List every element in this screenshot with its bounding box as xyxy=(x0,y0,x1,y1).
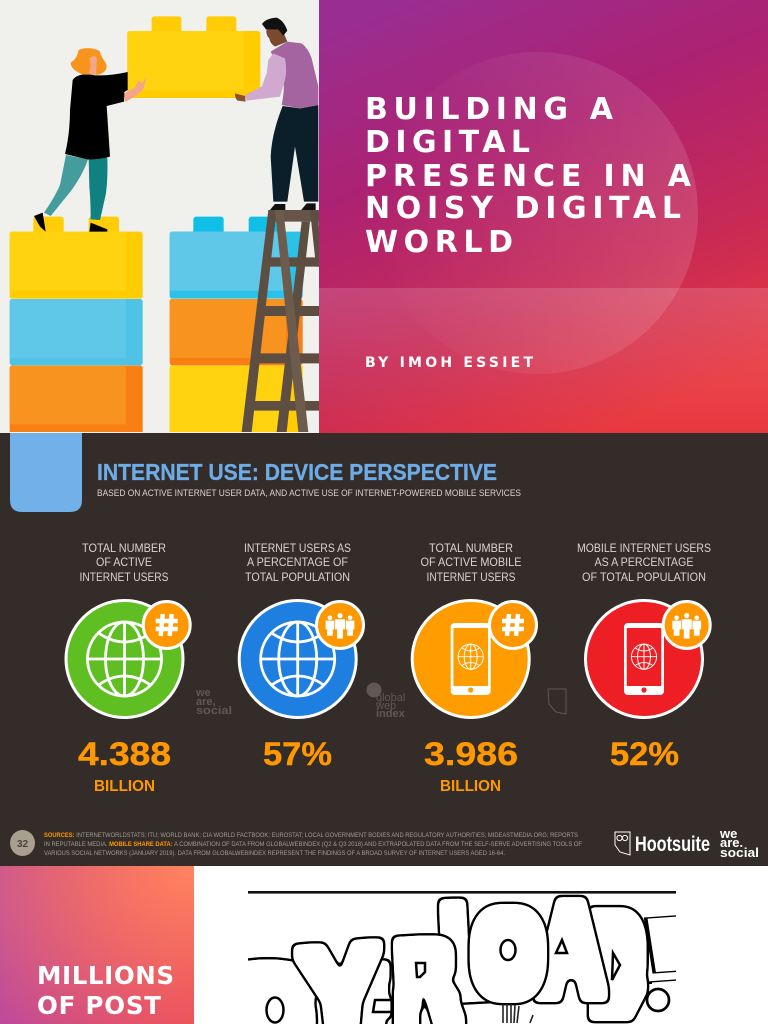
stat: total internet users xyxy=(66,541,190,795)
heading: MILLIONS xyxy=(37,961,174,990)
icon: wooden ladder xyxy=(242,210,320,432)
stat: mobile users share of population: AS A PERCENTAGE xyxy=(594,555,694,569)
stat: mobile users share of population: MOBILE INTERNET USERS xyxy=(577,541,711,555)
cartoon lettering: OVERLOAD!: R xyxy=(394,922,455,1023)
panel: title banner xyxy=(319,0,768,433)
watermark: we are social: social xyxy=(196,705,232,717)
icon: green globe with hash badge xyxy=(66,600,190,718)
watermark: we are social: we xyxy=(195,687,211,699)
panel: illustration of people building with bricks xyxy=(0,0,320,433)
title: BUILDING A xyxy=(365,92,614,127)
stat: total internet users: INTERNET USERS xyxy=(80,570,168,584)
stat: internet users share of population: A PERCENTAGE OF xyxy=(247,555,348,569)
stat: internet users share of population: TOTAL POPULATION xyxy=(245,570,350,584)
panel: internet use device perspective xyxy=(0,433,768,866)
heading: OF POST xyxy=(37,991,161,1020)
stat: mobile users share of population xyxy=(577,541,711,772)
watermark: globalwebindex: web xyxy=(375,700,396,712)
panel: overload cartoon background xyxy=(194,866,768,1024)
watermark: we are social xyxy=(195,687,232,717)
sources text: VARIOUS SOCIAL NETWORKS (JANUARY 2019). DATA FROM GLOBALWEBINDEX REPRESENT THE FINDINGS OF A BROAD SURVEY OF INTERNET USERS AGED 16-64. xyxy=(44,851,505,857)
stat: mobile internet users: TOTAL NUMBER xyxy=(429,541,513,555)
page number badge xyxy=(10,830,35,856)
icon: top yellow brick xyxy=(127,16,260,98)
illustration artwork xyxy=(10,16,320,432)
logo: Hootsuite: Hootsuite xyxy=(635,833,710,856)
icon: blue globe with people badge xyxy=(239,600,364,718)
title xyxy=(365,92,692,260)
stat: mobile internet users xyxy=(412,541,536,795)
icon: right brick stack xyxy=(170,217,303,432)
stat: total internet users: TOTAL NUMBER xyxy=(82,541,166,555)
watermark: globalwebindex xyxy=(366,682,406,720)
logo: we are social: are. xyxy=(720,835,743,850)
blue header tab xyxy=(10,433,82,512)
icon: man on ladder xyxy=(235,18,318,211)
subheading: BASED ON ACTIVE INTERNET USER DATA, AND ACTIVE USE OF INTERNET-POWERED MOBILE SERVICES xyxy=(97,488,521,499)
watermark: globalwebindex: index xyxy=(376,708,406,720)
logo: we are social: social xyxy=(720,845,759,860)
page number badge: 32 xyxy=(17,839,28,850)
icon: woman pushing brick xyxy=(34,48,147,232)
heading xyxy=(37,961,174,1020)
stat: total internet users: OF ACTIVE xyxy=(96,555,152,569)
stat: internet users share of population: INTERNET USERS AS xyxy=(244,541,351,555)
cartoon lettering: OVERLOAD!: E xyxy=(352,956,385,1024)
icon: red phone with people badge xyxy=(586,600,710,718)
watermark: owl logo xyxy=(548,689,566,714)
panel: millions of post xyxy=(0,866,194,1024)
sources text xyxy=(44,833,582,857)
watermark: globalwebindex: global xyxy=(376,692,405,704)
byline: BY IMOH ESSIET xyxy=(365,355,533,371)
value: 3.986 xyxy=(424,736,518,772)
title: WORLD xyxy=(365,225,513,260)
value: 52% xyxy=(610,736,679,772)
unit: BILLION xyxy=(440,778,501,795)
logo: Hootsuite xyxy=(615,832,710,856)
sources text: IN REPUTABLE MEDIA. MOBILE SHARE DATA: A COMBINATION OF DATA FROM GLOBALWEBINDEX (Q2 & Q3 2018) AND EXTRAPOLATED DATA FROM THE SELF-SERVE ADVERTISING TOOLS OF xyxy=(44,842,582,848)
title: PRESENCE IN A xyxy=(365,159,692,194)
heading: INTERNET USE: DEVICE PERSPECTIVE xyxy=(97,459,497,485)
cartoon lettering: OVERLOAD! xyxy=(248,894,676,1024)
unit: BILLION xyxy=(94,778,155,795)
icon: orange phone with hash badge xyxy=(412,600,536,718)
logo: we are social xyxy=(719,826,759,860)
value: 57% xyxy=(263,736,332,772)
watermark: we are social: are, xyxy=(196,696,216,708)
title: DIGITAL xyxy=(365,125,530,160)
logo: we are social: we xyxy=(719,826,737,841)
stat: mobile internet users: OF ACTIVE MOBILE xyxy=(420,555,522,569)
cartoon lettering: OVERLOAD!: V xyxy=(298,929,383,1024)
stat: mobile internet users: INTERNET USERS xyxy=(426,570,516,584)
title: NOISY DIGITAL xyxy=(365,191,681,226)
stat: internet users share of population xyxy=(239,541,364,772)
stat: mobile users share of population: OF TOTAL POPULATION xyxy=(582,570,706,584)
icon: left brick stack xyxy=(10,217,143,432)
value: 4.388 xyxy=(78,736,171,772)
sources text: SOURCES: INTERNETWORLDSTATS; ITU; WORLD BANK; CIA WORLD FACTBOOK; EUROSTAT; LOCAL GOVERNMENT BODIES AND REGULATORY AUTHORITIES; MIDEASTMEDIA.ORG; REPORTS xyxy=(44,833,578,839)
